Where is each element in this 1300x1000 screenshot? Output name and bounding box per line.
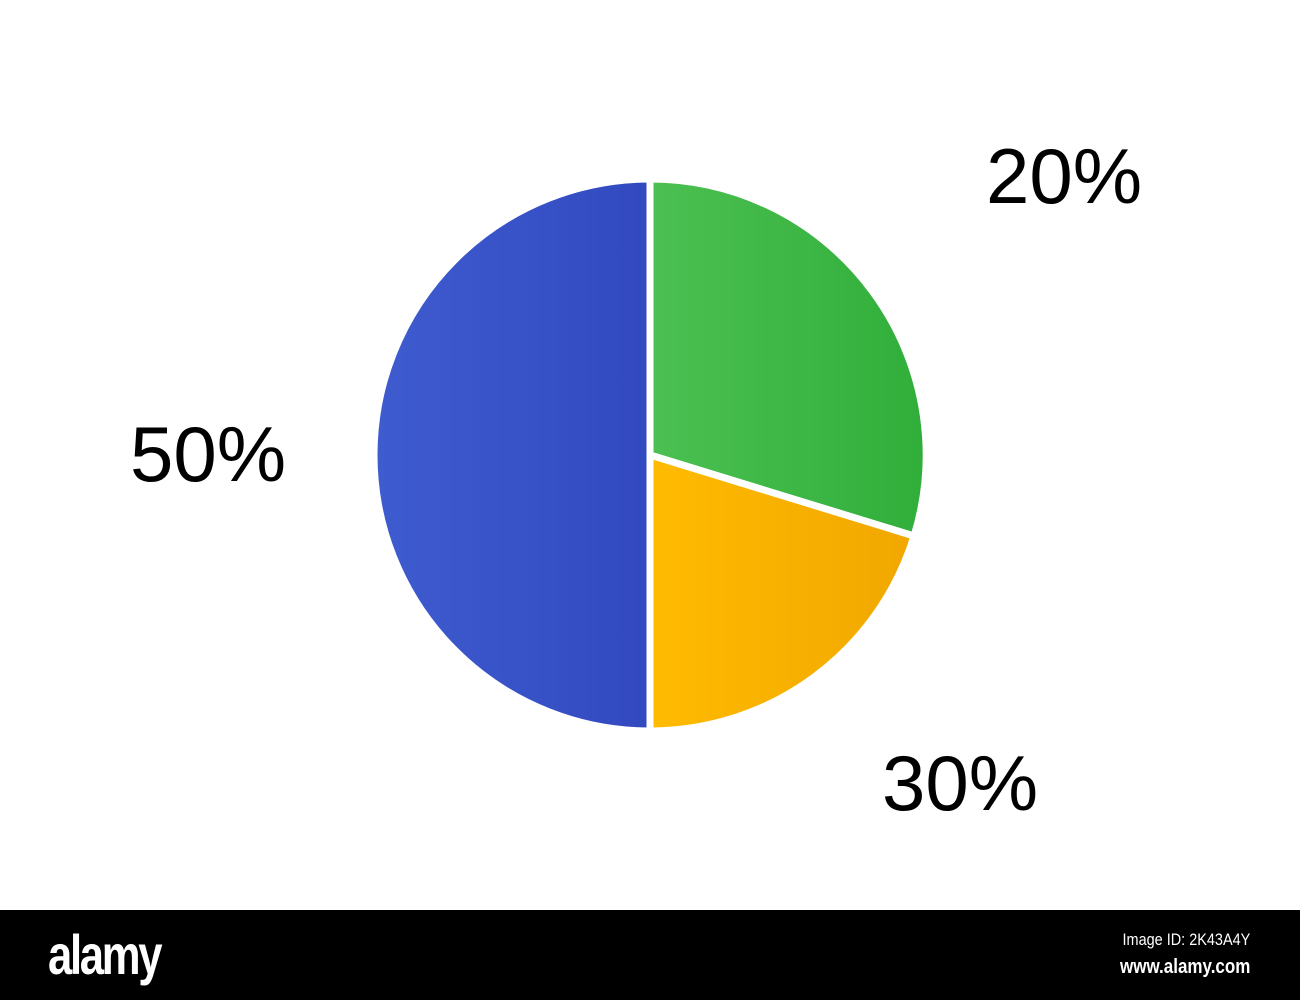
footer bar — [0, 910, 1300, 1000]
label: 50%: 50% — [130, 410, 286, 498]
image id: Image ID: 2K43A4Y — [1122, 930, 1250, 949]
slice: green — [650, 179, 926, 536]
logo: alamy: alamy — [48, 923, 160, 986]
slice: blue 50% — [374, 179, 650, 731]
url: www.alamy.com — [1120, 956, 1250, 978]
label: 20%: 20% — [986, 132, 1142, 220]
label: 30%: 30% — [882, 739, 1038, 827]
slice: yellow — [650, 455, 914, 731]
